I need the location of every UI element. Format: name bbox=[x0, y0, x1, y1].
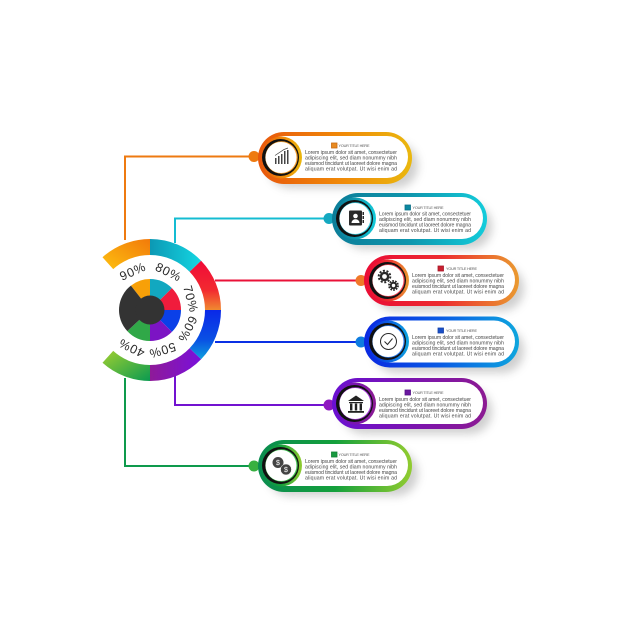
percent labels: 90% bbox=[118, 260, 148, 284]
body text: Lorem ipsum dolor sit amet, consectetuer bbox=[412, 335, 504, 341]
body text: adipiscing elit, sed diam nonummy nibh bbox=[412, 340, 504, 346]
donut chart bbox=[102, 239, 221, 381]
body text: aliquam erat volutpat. Ut wisi enim ad bbox=[412, 290, 504, 296]
title: YOUR TITLE HERE bbox=[338, 144, 370, 148]
card 2: teal bbox=[324, 193, 492, 249]
body text: euismod tincidunt ut laoreet dolore magna bbox=[305, 470, 397, 476]
title: YOUR TITLE HERE bbox=[412, 206, 444, 210]
body text: aliquam erat volutpat. Ut wisi enim ad bbox=[379, 414, 471, 420]
percent labels: 60% bbox=[175, 314, 200, 344]
title bbox=[438, 266, 477, 271]
outer ring segment: 80% bbox=[150, 239, 201, 272]
percent labels: 70% bbox=[180, 284, 201, 314]
connector: card 3 bbox=[215, 280, 360, 282]
icon: clock bbox=[380, 334, 396, 350]
percent labels: 50% bbox=[147, 339, 177, 361]
title bbox=[405, 390, 444, 395]
icon: bank bbox=[348, 396, 364, 413]
card 4: blue bbox=[356, 316, 524, 373]
outer ring segment: 90% bbox=[102, 239, 150, 269]
card 1: orange bbox=[248, 132, 418, 188]
body text: euismod tincidunt ut laoreet dolore magna bbox=[379, 222, 471, 228]
icon: coins bbox=[272, 457, 292, 475]
percent labels bbox=[116, 260, 201, 361]
outer ring segment: 60% bbox=[190, 310, 221, 359]
title: YOUR TITLE HERE bbox=[412, 391, 444, 395]
percent labels: 40% bbox=[116, 335, 147, 360]
connector: card 6 bbox=[125, 378, 252, 466]
body text: aliquam erat volutpat. Ut wisi enim ad bbox=[305, 476, 397, 482]
body text: Lorem ipsum dolor sit amet, consectetuer bbox=[379, 397, 471, 403]
body text: euismod tincidunt ut laoreet dolore magna bbox=[412, 346, 504, 352]
body text: adipiscing elit, sed diam nonummy nibh bbox=[412, 278, 504, 284]
icon: coins: $ bbox=[276, 460, 280, 467]
title: YOUR TITLE HERE bbox=[338, 453, 370, 457]
icon: gears bbox=[379, 271, 398, 290]
title bbox=[438, 328, 477, 333]
percent labels: 80% bbox=[153, 260, 184, 285]
title: YOUR TITLE HERE bbox=[446, 329, 477, 333]
body text bbox=[412, 273, 504, 296]
body text: adipiscing elit, sed diam nonummy nibh bbox=[305, 464, 397, 470]
icon: contact book bbox=[349, 210, 364, 226]
body text: aliquam erat volutpat. Ut wisi enim ad bbox=[379, 228, 471, 234]
card 3: red bbox=[356, 255, 524, 311]
connector: card 1 bbox=[125, 156, 252, 240]
body text: euismod tincidunt ut laoreet dolore magna bbox=[305, 161, 397, 167]
body text bbox=[305, 459, 397, 482]
icon: coins: $ bbox=[284, 467, 288, 474]
body text: adipiscing elit, sed diam nonummy nibh bbox=[379, 402, 471, 408]
title: YOUR TITLE HERE bbox=[446, 267, 477, 271]
outer ring segment: 70% bbox=[190, 261, 221, 310]
outer ring segment: 50% bbox=[150, 348, 201, 381]
connector: card 2 bbox=[175, 218, 328, 243]
body text: Lorem ipsum dolor sit amet, consectetuer bbox=[412, 273, 504, 279]
body text bbox=[305, 150, 397, 172]
connector: card 5 bbox=[175, 376, 328, 405]
title bbox=[405, 205, 444, 210]
body text: aliquam erat volutpat. Ut wisi enim ad bbox=[412, 352, 504, 358]
body text: adipiscing elit, sed diam nonummy nibh bbox=[305, 156, 397, 162]
body text: Lorem ipsum dolor sit amet, consectetuer bbox=[305, 459, 397, 465]
card 6: green bbox=[248, 440, 418, 496]
body text: euismod tincidunt ut laoreet dolore magna bbox=[379, 408, 471, 414]
body text bbox=[412, 335, 504, 358]
body text: aliquam erat volutpat. Ut wisi enim ad bbox=[305, 166, 397, 172]
connector: card 4 bbox=[215, 341, 360, 343]
title bbox=[332, 143, 370, 148]
outer ring segment: 40% bbox=[102, 351, 150, 381]
body text bbox=[379, 397, 471, 420]
body text: euismod tincidunt ut laoreet dolore magna bbox=[412, 284, 504, 290]
body text: Lorem ipsum dolor sit amet, consectetuer bbox=[379, 212, 471, 218]
title bbox=[332, 452, 370, 457]
body text: adipiscing elit, sed diam nonummy nibh bbox=[379, 217, 471, 223]
body text: Lorem ipsum dolor sit amet, consectetuer bbox=[305, 150, 397, 156]
card 5: purple bbox=[324, 378, 492, 434]
inner pie bbox=[119, 279, 181, 341]
icon: bar chart bbox=[275, 148, 288, 164]
body text bbox=[379, 212, 471, 234]
